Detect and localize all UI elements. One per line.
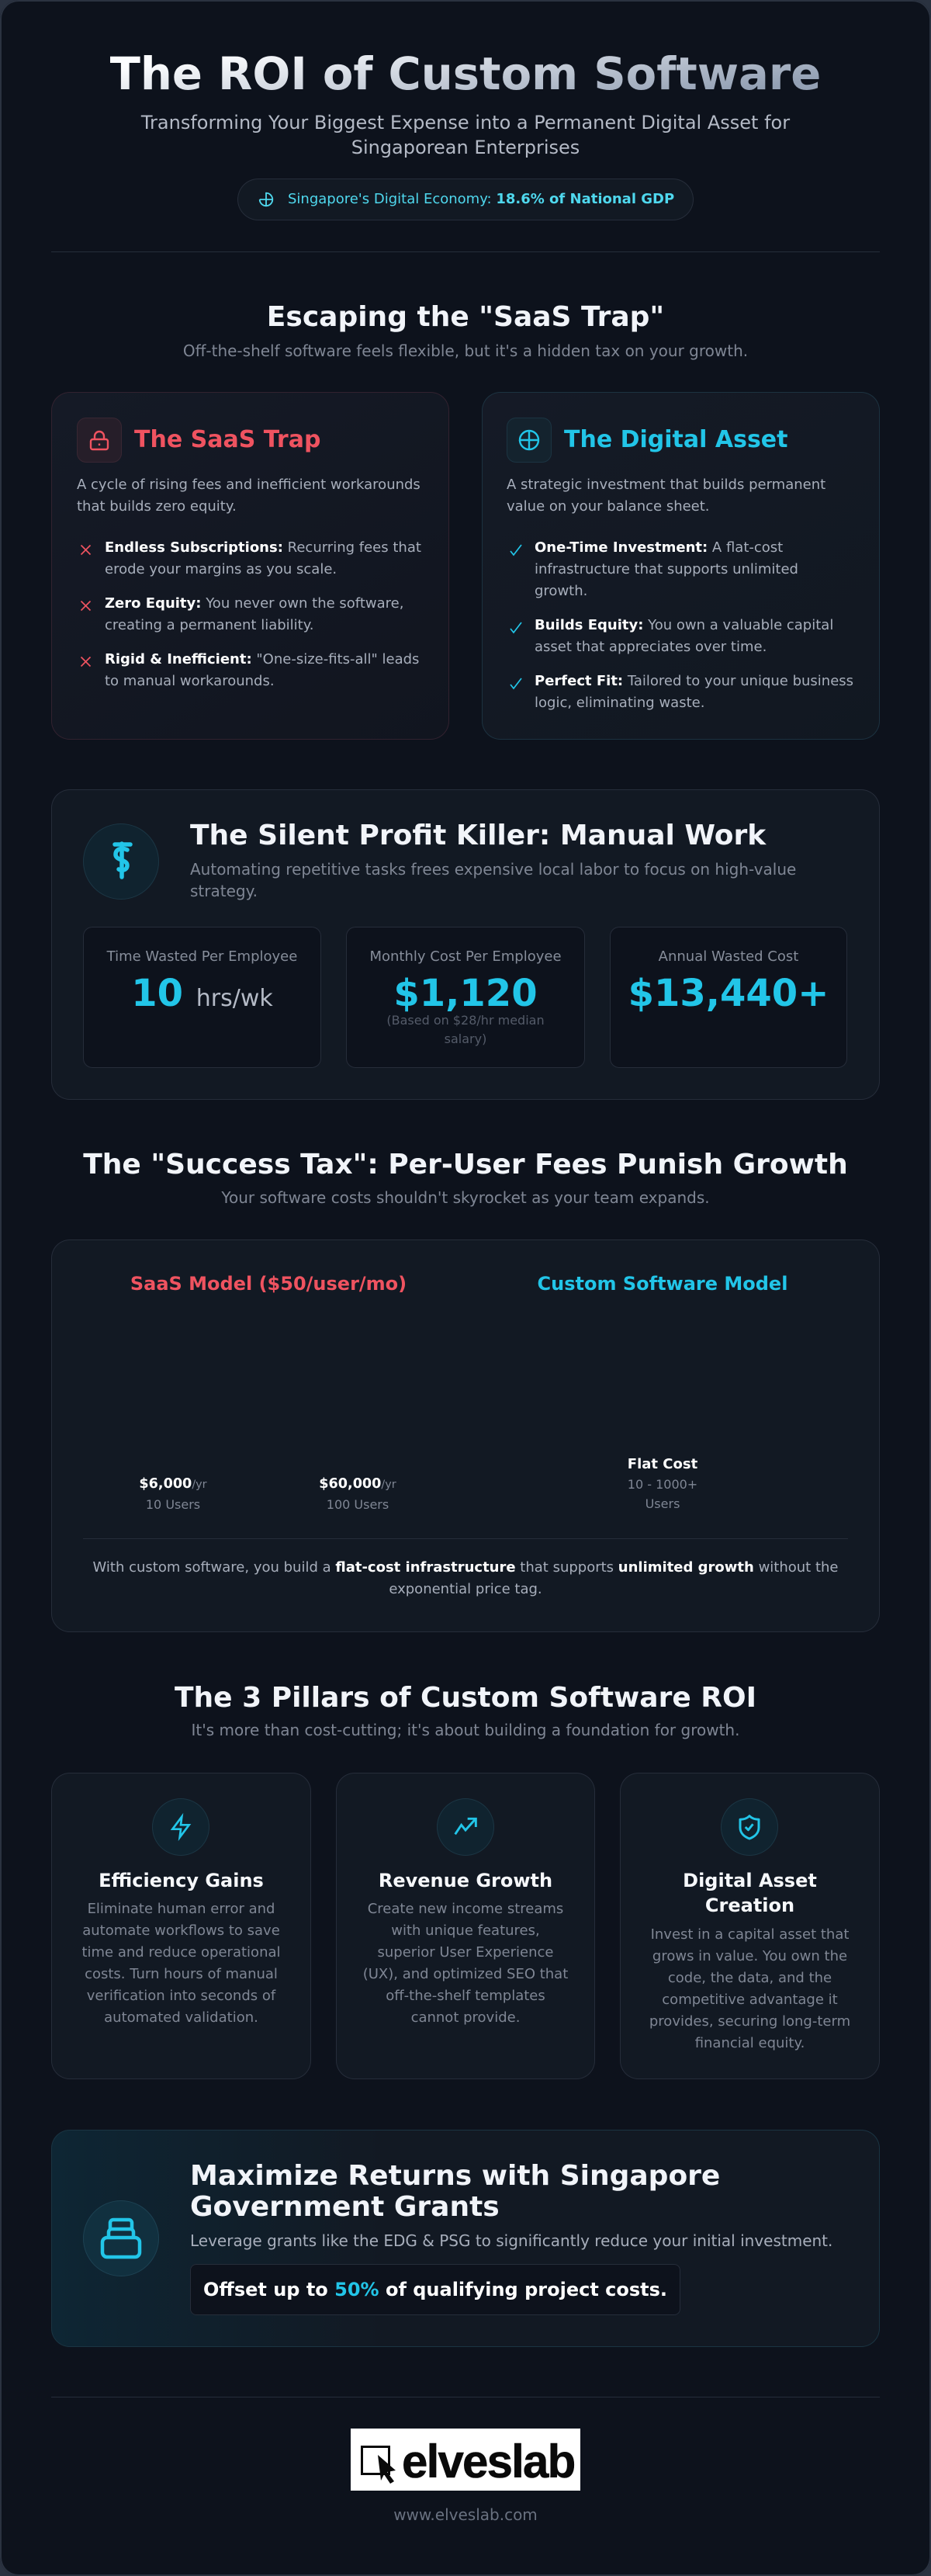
stat label: Time Wasted Per Employee (107, 948, 297, 965)
item text (105, 651, 419, 689)
website: www.elveslab.com (393, 2505, 538, 2524)
panel: revenue growth (336, 1773, 595, 2079)
card description (77, 477, 421, 515)
item: perfect fit (510, 673, 853, 711)
footer (51, 2429, 880, 2526)
icon: shield check (721, 1798, 778, 1856)
pillar description: code, the data, and the (668, 1970, 832, 1986)
pillar description (649, 1926, 850, 2051)
subheading: Off-the-shelf software feels flexible, but it's a hidden tax on your growth. (183, 342, 748, 360)
bar label: flat cost: Users (645, 1496, 680, 1511)
item text: growth. (535, 583, 587, 599)
header (110, 48, 821, 220)
card description: A cycle of rising fees and inefficient workarounds (77, 477, 421, 493)
pillar description: verification into seconds of (87, 1988, 275, 2004)
chart heading: custom model: Custom Software Model (538, 1273, 787, 1295)
panel subheading: Automating repetitive tasks frees expensive local labor to focus on high-value (190, 860, 796, 879)
stat note: salary) (445, 1031, 486, 1046)
stat note: (Based on $28/hr median (386, 1013, 545, 1028)
item text: One-Time Investment: A flat-cost (535, 539, 783, 556)
item text (535, 539, 798, 599)
icon: globe (507, 418, 552, 463)
pillar description: costs. Turn hours of manual (85, 1966, 278, 1982)
subtitle: Singaporean Enterprises (351, 137, 580, 158)
panel heading: The Silent Profit Killer: Manual Work (190, 820, 766, 851)
item text: asset that appreciates over time. (535, 639, 767, 655)
GDP pill (237, 179, 694, 220)
item text (105, 595, 403, 633)
icon: dollar (83, 823, 159, 900)
chart takeaway (92, 1559, 838, 1597)
pillar description: automate workflows to save (82, 1922, 280, 1939)
panel: silent profit killer (51, 789, 880, 1100)
item text (535, 673, 853, 711)
icon: cross (81, 657, 91, 667)
item text (105, 539, 421, 577)
card description: that builds zero equity. (77, 498, 237, 515)
heading: The "Success Tax": Per-User Fees Punish Growth (83, 1149, 848, 1181)
item: rigid (81, 651, 419, 689)
pillar title: Efficiency Gains (99, 1870, 264, 1891)
card description: A strategic investment that builds permanent (507, 477, 825, 493)
pillar description (363, 1901, 568, 2026)
grant heading: Maximize Returns with Singapore (190, 2160, 720, 2192)
stat note (386, 1013, 545, 1046)
panel: government grants (51, 2130, 880, 2347)
stat value: $13,440+ (628, 972, 829, 1015)
item text: infrastructure that supports unlimited (535, 561, 798, 577)
item text: Rigid & Inefficient: "One-size-fits-all" leads (105, 651, 419, 667)
panel subheading: strategy. (190, 882, 258, 900)
item: builds equity (510, 617, 833, 655)
pillar description: automated validation. (104, 2009, 258, 2026)
item text: Builds Equity: You own a valuable capital (535, 617, 833, 633)
pillar description: Eliminate human error and (88, 1901, 275, 1917)
bar label: 100 users (319, 1476, 396, 1512)
icon: trending up (437, 1798, 494, 1856)
chart takeaway: exponential price tag. (389, 1581, 542, 1597)
panel: digital asset creation (620, 1773, 880, 2079)
panel: cost comparison chart (51, 1239, 880, 1632)
card title: The Digital Asset (564, 426, 788, 453)
bar label: 100 users: $60,000/yr (319, 1476, 396, 1492)
stat value: 10 hrs/wk (131, 972, 273, 1015)
bar label: 10 users: 10 Users (146, 1497, 200, 1512)
logo (351, 2429, 580, 2491)
pillar description: superior User Experience (378, 1944, 553, 1961)
callout text: Offset up to 50% of qualifying project costs. (203, 2279, 667, 2300)
GDP text: Singapore's Digital Economy: 18.6% of National GDP (288, 191, 674, 207)
subtitle: Transforming Your Biggest Expense into a Permanent Digital Asset for (141, 112, 790, 133)
item text: creating a permanent liability. (105, 617, 314, 633)
icon: lightning (152, 1798, 209, 1856)
icon: check (510, 678, 522, 689)
panel: efficiency gains (51, 1773, 311, 2079)
grant subheading: Leverage grants like the EDG & PSG to significantly reduce your initial investment. (190, 2231, 832, 2250)
pillar title (683, 1870, 817, 1916)
pillar description: competitive advantage it (662, 1992, 838, 2008)
subheading: Your software costs shouldn't skyrocket as your team expands. (221, 1188, 710, 1207)
pillar description: Invest in a capital asset that (651, 1926, 849, 1943)
icon: check (510, 545, 522, 556)
icon: cross (81, 545, 91, 556)
stat: monthly cost (346, 927, 585, 1068)
icon: lock (77, 418, 122, 463)
stat: time wasted (83, 927, 321, 1068)
card description (507, 477, 825, 515)
item text: erode your margins as you scale. (105, 561, 337, 577)
item text: Endless Subscriptions: Recurring fees that (105, 539, 421, 556)
pillar title: Digital Asset (683, 1870, 817, 1891)
bar label: 10 users: $6,000/yr (139, 1476, 207, 1492)
stat value: $1,120 (393, 972, 538, 1015)
icon: globe (259, 192, 273, 206)
heading: Escaping the "SaaS Trap" (267, 301, 664, 333)
stat: annual wasted cost (610, 927, 847, 1068)
pillar description: provides, securing long-term (649, 2013, 850, 2030)
stat label: Monthly Cost Per Employee (369, 948, 562, 965)
heading: The 3 Pillars of Custom Software ROI (175, 1682, 756, 1714)
title: The ROI of Custom Software (110, 48, 821, 100)
item: one-time investment (510, 539, 798, 599)
bar label: flat cost (628, 1456, 697, 1511)
icon: layered bag (83, 2200, 159, 2276)
item: zero equity (81, 595, 403, 633)
pillar description: financial equity. (695, 2035, 805, 2051)
section heading: success tax (83, 1149, 848, 1207)
pillar title: Creation (705, 1895, 794, 1916)
grant heading: Government Grants (190, 2191, 500, 2223)
panel: the digital asset (482, 392, 880, 740)
chart heading: SaaS model: SaaS Model ($50/user/mo) (130, 1273, 407, 1295)
pillar description (81, 1901, 281, 2026)
pillar title: Revenue Growth (379, 1870, 552, 1891)
icon: cursor in square (351, 2429, 580, 2491)
pillar description: time and reduce operational (81, 1944, 281, 1961)
item text: Zero Equity: You never own the software, (105, 595, 403, 612)
icon: check (510, 622, 522, 633)
item text: logic, eliminating waste. (535, 695, 704, 711)
grant callout (190, 2264, 680, 2315)
panel: the SaaS trap (51, 392, 449, 740)
icon: cross (81, 601, 91, 612)
section heading: SaaS trap (183, 301, 748, 360)
stat label: Annual Wasted Cost (659, 948, 798, 965)
chart takeaway: With custom software, you build a flat-cost infrastructure that supports unlimited growth without the (92, 1559, 838, 1576)
pillar description: (UX), and optimized SEO that (363, 1966, 568, 1982)
pillar description: with unique features, (391, 1922, 540, 1939)
item text (535, 617, 833, 655)
bar label: flat cost: 10 - 1000+ (628, 1477, 697, 1492)
grant heading (190, 2160, 720, 2223)
subheading: It's more than cost-cutting; it's about building a foundation for growth. (192, 1721, 739, 1739)
section heading: pillars (175, 1682, 756, 1739)
subtitle (141, 112, 790, 158)
item: endless subscriptions (81, 539, 421, 577)
pillar description: cannot provide. (411, 2009, 520, 2026)
pillar description: grows in value. You own the (652, 1948, 847, 1964)
item text: to manual workarounds. (105, 673, 275, 689)
card title: The SaaS Trap (134, 426, 320, 453)
bar label: 100 users: 100 Users (327, 1497, 389, 1512)
logo wordmark: elveslab (402, 2436, 574, 2488)
bar label: flat cost: Flat Cost (628, 1456, 697, 1472)
pillar description: Create new income streams (368, 1901, 563, 1917)
panel subheading (190, 860, 796, 900)
item text: Perfect Fit: Tailored to your unique business (535, 673, 853, 689)
bar label: 10 users (139, 1476, 207, 1512)
pillar description: off-the-shelf templates (386, 1988, 545, 2004)
card description: value on your balance sheet. (507, 498, 710, 515)
